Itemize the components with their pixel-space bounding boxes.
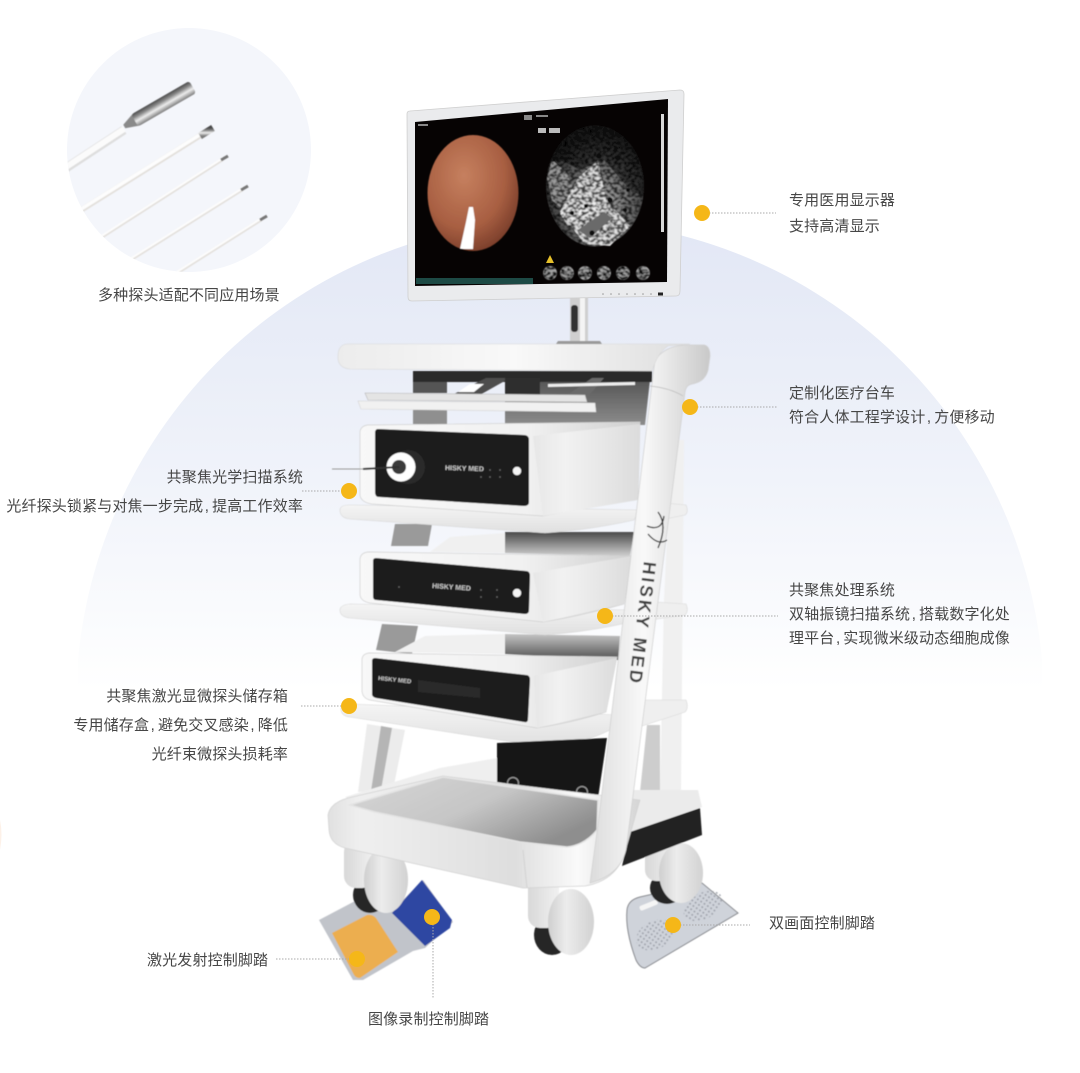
callout: storage box: 专用储存盒,避免交叉感染,降低: [73, 716, 288, 734]
power button: [513, 589, 521, 597]
monitor: [407, 90, 684, 301]
column logo mark: [647, 512, 667, 548]
callout: trolley: 符合人体工程学设计,方便移动: [789, 409, 995, 426]
thumbnails: [543, 266, 650, 280]
confocal view: [546, 126, 644, 247]
scanning unit box: [332, 422, 640, 516]
warning marker: [546, 255, 554, 263]
callout: storage box: 光纤束微探头损耗率: [152, 746, 288, 763]
brand mark: HISKY MED: [378, 676, 412, 686]
status bar: [416, 278, 533, 284]
keyboard: [365, 393, 587, 402]
on-screen readout: [418, 115, 560, 133]
medical trolley: [319, 297, 738, 980]
display window: [418, 680, 480, 698]
support column: [590, 345, 710, 883]
callout: image recording pedal: 图像录制控制脚踏: [368, 1011, 489, 1028]
shelf 1: [340, 505, 640, 533]
laser and image foot pedal: [319, 880, 453, 980]
brightness bar: [661, 114, 664, 232]
endoscopic view: [428, 135, 518, 251]
callout: scanning system: 共聚焦光学扫描系统: [167, 469, 303, 486]
callout: storage box: 共聚焦激光显微探头储存箱: [106, 688, 288, 705]
background arc: [78, 220, 1042, 690]
base: [328, 776, 640, 888]
callout: dual-view pedal: 双画面控制脚踏: [769, 915, 875, 932]
pedal label plate: [639, 899, 658, 911]
shelf 2: [340, 604, 630, 635]
callout: processing system: 双轴振镜扫描系统,搭载数字化处: [789, 605, 1010, 623]
front-left caster: [344, 840, 408, 913]
second shelf back: [430, 533, 505, 553]
power button: [513, 467, 521, 475]
shelf 1 right wing: [660, 503, 687, 520]
callout: processing system: 理平台,实现微米级动态细胞成像: [789, 630, 1010, 647]
processing unit box: [360, 552, 632, 622]
callout: trolley: 定制化医疗台车: [789, 385, 895, 402]
callout: dual-view pedal: [665, 915, 875, 933]
shelf 3 right wing: [642, 700, 687, 726]
keyboard tray: [358, 401, 596, 412]
callout: monitor: [694, 192, 895, 235]
keyboard arm mechanism: [413, 371, 652, 400]
dual-view foot pedal: [627, 883, 738, 968]
front-center caster: [528, 876, 594, 955]
callout: scanning system: [6, 469, 357, 515]
callout: monitor: 支持高清显示: [789, 218, 880, 235]
callout: laser pedal: [147, 951, 365, 969]
lower storage box: [497, 738, 607, 798]
monitor mount: [556, 297, 602, 344]
probe storage box: [362, 653, 617, 728]
status indicators: [398, 586, 498, 598]
base seam: [523, 850, 527, 888]
rear back wall: [505, 380, 650, 425]
column brand text: HISKY MED: [625, 561, 660, 687]
callout: storage box: [73, 688, 357, 763]
callout: laser pedal: 激光发射控制脚踏: [147, 952, 268, 969]
brand mark: HISKY MED: [432, 583, 471, 593]
optical fiber: [332, 467, 399, 469]
shelf 3: [341, 704, 620, 747]
base rear section: [622, 790, 702, 866]
callout: monitor: 专用医用显示器: [789, 192, 895, 209]
bezel buttons: [602, 292, 663, 296]
callout: scanning system: 光纤探头锁紧与对焦一步完成,提高工作效率: [6, 498, 303, 515]
probes caption: 多种探头适配不同应用场景: [98, 286, 280, 304]
image recording pedal: [392, 880, 452, 946]
callout: trolley: [682, 385, 995, 426]
column seam: [650, 386, 683, 396]
tray: [350, 777, 598, 847]
top shelf: [338, 344, 690, 371]
callout: image recording pedal: [368, 909, 489, 1028]
shelf 2 right wing: [650, 602, 687, 620]
laser emission pedal: [332, 915, 398, 978]
pedal grip patterns: [631, 885, 728, 957]
status indicators: [480, 469, 501, 478]
third shelf back: [395, 634, 505, 654]
base floor behind tray: [345, 758, 497, 815]
rear caster: [645, 843, 703, 904]
brand mark: HISKY MED: [445, 465, 484, 473]
callout: processing system: [597, 582, 1010, 647]
callout: processing system: 共聚焦处理系统: [789, 582, 895, 599]
probes circle: [60, 28, 311, 276]
rear uprights: [358, 372, 684, 792]
faint edge tint: [0, 820, 2, 850]
knob: [386, 450, 425, 484]
probe set: [60, 81, 267, 276]
